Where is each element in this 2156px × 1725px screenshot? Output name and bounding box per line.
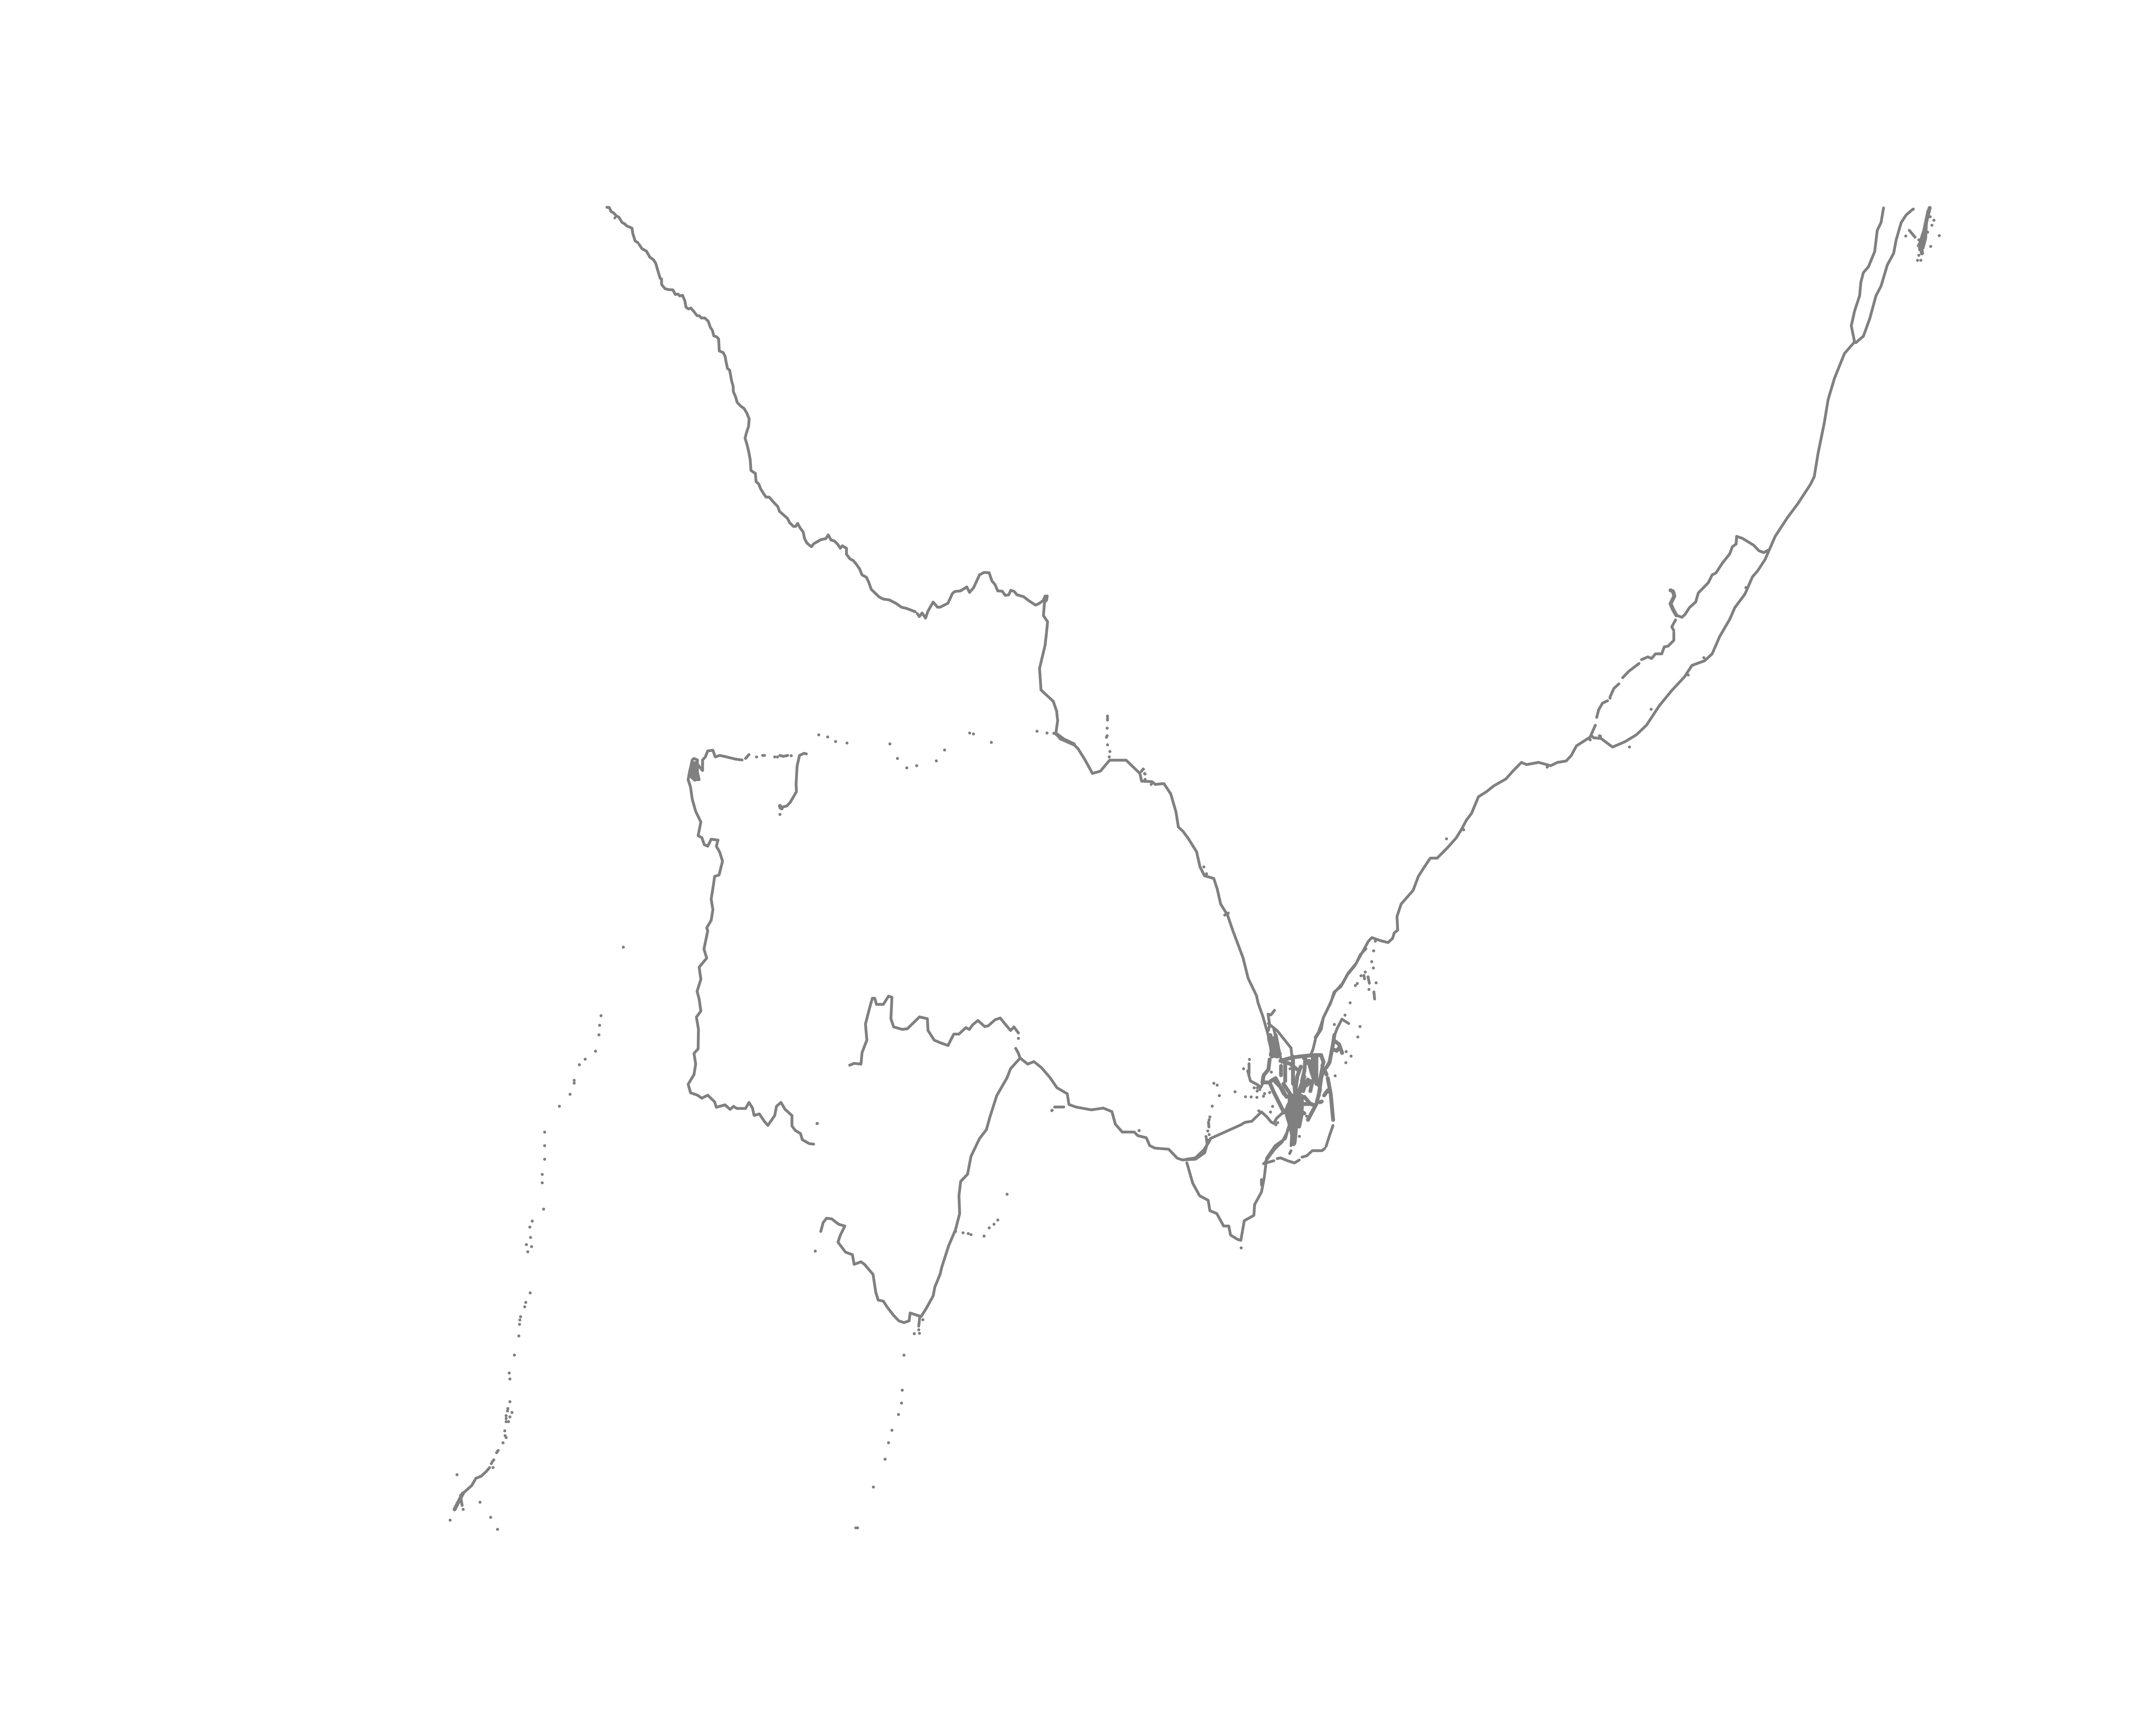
- hub: central tangle of routes: [1263, 1035, 1342, 1144]
- route: western tangle: [692, 734, 1074, 808]
- scattered points: south-western column: [450, 947, 624, 1529]
- route: southern lines: [815, 996, 1289, 1528]
- scattered points: north-east cluster: [1590, 209, 1939, 747]
- route: central line to hub: [1074, 725, 1601, 1038]
- scattered points: southern column: [856, 1355, 904, 1528]
- scattered points: along trunks: [1141, 736, 1601, 941]
- route: north-east trunk: [1315, 725, 1595, 1038]
- route: south-west end: [454, 1493, 463, 1509]
- route: north-west line: [607, 207, 1047, 644]
- route: western loop: [688, 712, 1145, 1144]
- hub: dense network of routes: [1186, 949, 1376, 1164]
- scattered points: south-central: [815, 1038, 1241, 1334]
- scattered points: northern gap: [757, 716, 1145, 1131]
- route: north-east spur: [1670, 590, 1677, 615]
- route: north-east cluster: [1919, 208, 1930, 254]
- route: north-east corridor and branches: [1590, 208, 1939, 747]
- scattered points: around hub: [1206, 951, 1376, 1144]
- route: connector down to central line: [1040, 644, 1057, 712]
